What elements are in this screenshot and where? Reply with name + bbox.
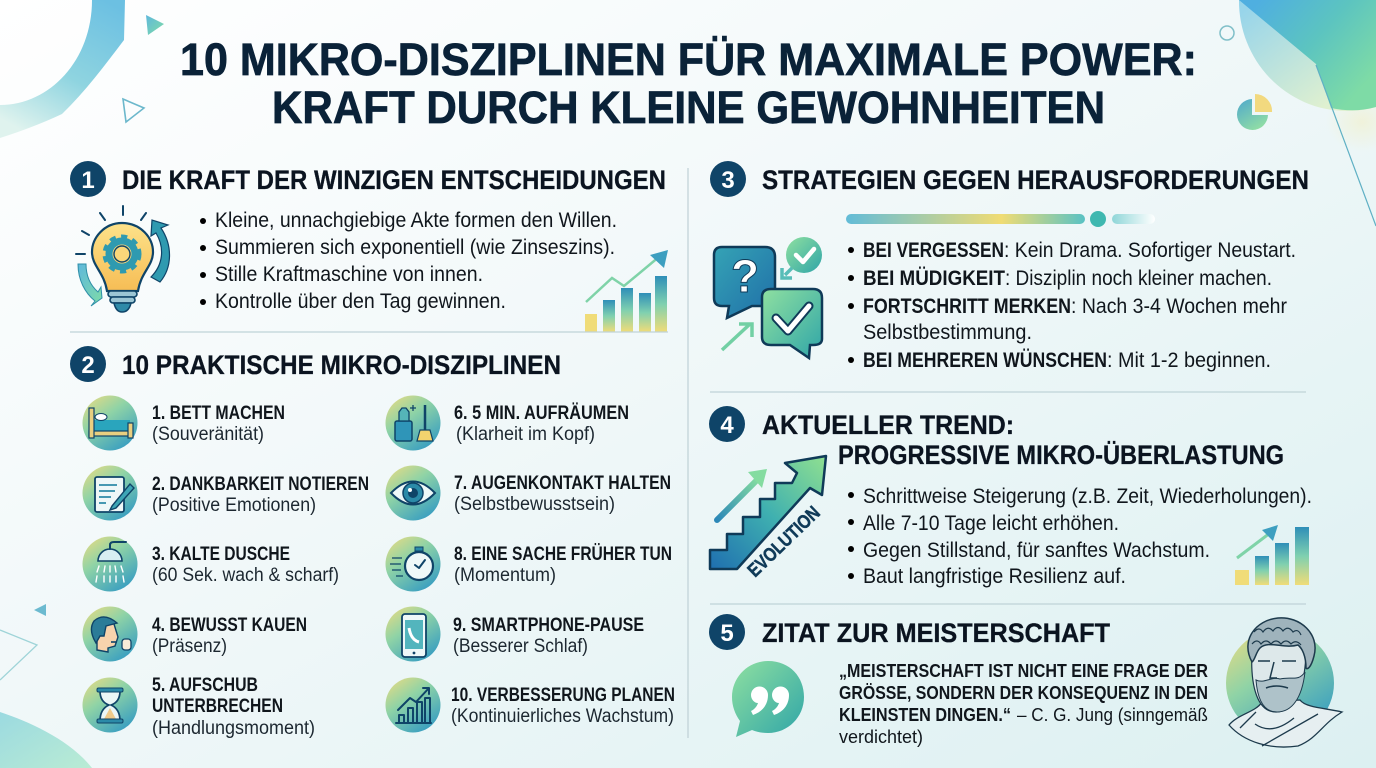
quote text: KLEINSTEN DINGEN.“ (839, 704, 1011, 725)
item 10 (386, 678, 675, 732)
item 6 (386, 396, 629, 450)
decoration: pie chart (1237, 94, 1272, 130)
item 3: (60 Sek. wach & scharf) (152, 565, 339, 586)
icon: small growth chart (1235, 525, 1309, 585)
quote text: „MEISTERSCHAFT IST NICHT EINE FRAGE DER (839, 660, 1208, 681)
heading 5: ZITAT ZUR MEISTERSCHAFT (762, 618, 1110, 648)
bullet list 3: Selbstbestimmung. (863, 321, 1032, 344)
title (180, 34, 1197, 133)
title: KRAFT DURCH KLEINE GEWOHNHEITEN (272, 82, 1105, 133)
item 8 (386, 536, 672, 592)
bullet list 4: Baut langfristige Resilienz auf. (863, 565, 1126, 588)
item 2: 2. DANKBARKEIT NOTIEREN (152, 474, 369, 495)
item 4: 4. BEWUSST KAUEN (152, 615, 307, 636)
icon: quote bubble (732, 661, 804, 737)
quote text: GRÖSSE, SONDERN DER KONSEQUENZ IN DEN (839, 682, 1208, 703)
decoration: bottom-left corner (0, 604, 92, 768)
item 5 (82, 675, 315, 739)
item 8: 8. EINE SACHE FRÜHER TUN (454, 544, 672, 565)
bullet list 3: : Nach 3-4 Wochen mehr (1071, 295, 1287, 318)
item 9 (386, 606, 644, 662)
bullet list 1: Summieren sich exponentiell (wie Zinseszins). (215, 236, 615, 259)
item 6: 6. 5 MIN. AUFRÄUMEN (454, 403, 629, 424)
title: 10 MIKRO-DISZIPLINEN FÜR MAXIMALE POWER: (180, 34, 1197, 85)
bullet list 1 (200, 209, 617, 313)
item 10: (Kontinuierliches Wachstum) (451, 706, 674, 727)
bullet list 1: Kontrolle über den Tag gewinnen. (215, 290, 506, 313)
bullet list 4: Gegen Stillstand, für sanftes Wachstum. (863, 539, 1210, 562)
badge 2 (70, 346, 106, 382)
item 3: 3. KALTE DUSCHE (152, 544, 290, 565)
heading 4 (762, 410, 1284, 470)
badge 1 (70, 161, 106, 197)
bullet list 1: Stille Kraftmaschine von innen. (215, 263, 483, 286)
item 9: (Besserer Schlaf) (453, 636, 588, 657)
item 2: (Positive Emotionen) (152, 495, 316, 516)
icon: evolution stairs arrow (710, 456, 826, 582)
decoration: top-right blob (1239, 0, 1376, 226)
panel: section 3 (710, 161, 1309, 372)
bullet list 4 (848, 485, 1312, 588)
decoration: green triangle (146, 15, 164, 35)
decoration: outline triangle (123, 99, 144, 122)
decoration: small ring (1220, 26, 1234, 40)
item 4: (Präsenz) (152, 636, 227, 657)
icon: question and check bubbles (714, 237, 822, 358)
bullet list 3: : Kein Drama. Sofortiger Neustart. (1004, 239, 1296, 262)
item 1: (Souveränität) (152, 424, 264, 445)
item 5: UNTERBRECHEN (152, 696, 283, 717)
panel: section 2 (70, 346, 675, 739)
icon: growth chart (585, 250, 668, 332)
icon: philosopher bust (1226, 618, 1342, 747)
heading 1: DIE KRAFT DER WINZIGEN ENTSCHEIDUNGEN (122, 165, 666, 195)
bullet list 3: BEI VERGESSEN (863, 239, 1004, 262)
item 7 (386, 466, 671, 520)
bullet list 3: BEI MÜDIGKEIT (863, 267, 1005, 290)
bullet list 3: FORTSCHRITT MERKEN (863, 295, 1071, 318)
item 1: 1. BETT MACHEN (152, 403, 285, 424)
panel: section 4 (709, 406, 1312, 588)
panel: section 5 (709, 614, 1342, 747)
item 6: (Klarheit im Kopf) (456, 424, 595, 445)
quote text (839, 660, 1208, 747)
bullet list 4: Schrittweise Steigerung (z.B. Zeit, Wiederholungen). (863, 485, 1312, 508)
item 10: 10. VERBESSERUNG PLANEN (451, 685, 675, 706)
badge 5: 5 (720, 620, 734, 647)
badge 5 (709, 614, 745, 650)
badge 3 (710, 161, 746, 197)
bullet list 3 (848, 239, 1296, 372)
item 9: 9. SMARTPHONE-PAUSE (453, 615, 644, 636)
badge 3: 3 (721, 167, 735, 194)
bullet list 4: Alle 7-10 Tage leicht erhöhen. (863, 512, 1119, 535)
badge 4 (709, 406, 745, 442)
heading 4: PROGRESSIVE MIKRO-ÜBERLASTUNG (838, 440, 1284, 470)
icon: evolution stairs arrow: EVOLUTION (744, 503, 825, 582)
item 5: (Handlungsmoment) (152, 718, 315, 739)
badge 1: 1 (81, 167, 95, 194)
item 8: (Momentum) (454, 565, 556, 586)
heading 3: STRATEGIEN GEGEN HERAUSFORDERUNGEN (762, 165, 1309, 195)
heading 2: 10 PRAKTISCHE MIKRO-DISZIPLINEN (122, 350, 561, 380)
item 5: 5. AUFSCHUB (152, 675, 258, 696)
heading 4: AKTUELLER TREND: (762, 410, 1014, 440)
bullet list 3: BEI MEHREREN WÜNSCHEN (863, 349, 1107, 372)
item 2 (82, 466, 369, 520)
icon: question and check bubbles: ? (731, 250, 759, 302)
item 1 (82, 396, 285, 450)
badge 4: 4 (720, 412, 734, 439)
quote text: – C. G. Jung (sinngemäß (1017, 704, 1208, 725)
item 3 (82, 536, 339, 592)
item 7: 7. AUGENKONTAKT HALTEN (454, 473, 671, 494)
bullet list 1: Kleine, unnachgiebige Akte formen den Willen. (215, 209, 617, 232)
item 4 (82, 606, 307, 662)
decoration: top-left ring (0, 0, 125, 138)
badge 2: 2 (81, 352, 95, 379)
progress bar (846, 211, 1155, 227)
quote text: verdichtet) (839, 726, 923, 747)
bullet list 3: : Disziplin noch kleiner machen. (1005, 267, 1272, 290)
icon: light bulb with gear (76, 206, 170, 312)
panel: section 1 (70, 161, 668, 332)
item 7: (Selbstbewusstsein) (454, 494, 615, 515)
bullet list 3: : Mit 1-2 beginnen. (1107, 349, 1271, 372)
